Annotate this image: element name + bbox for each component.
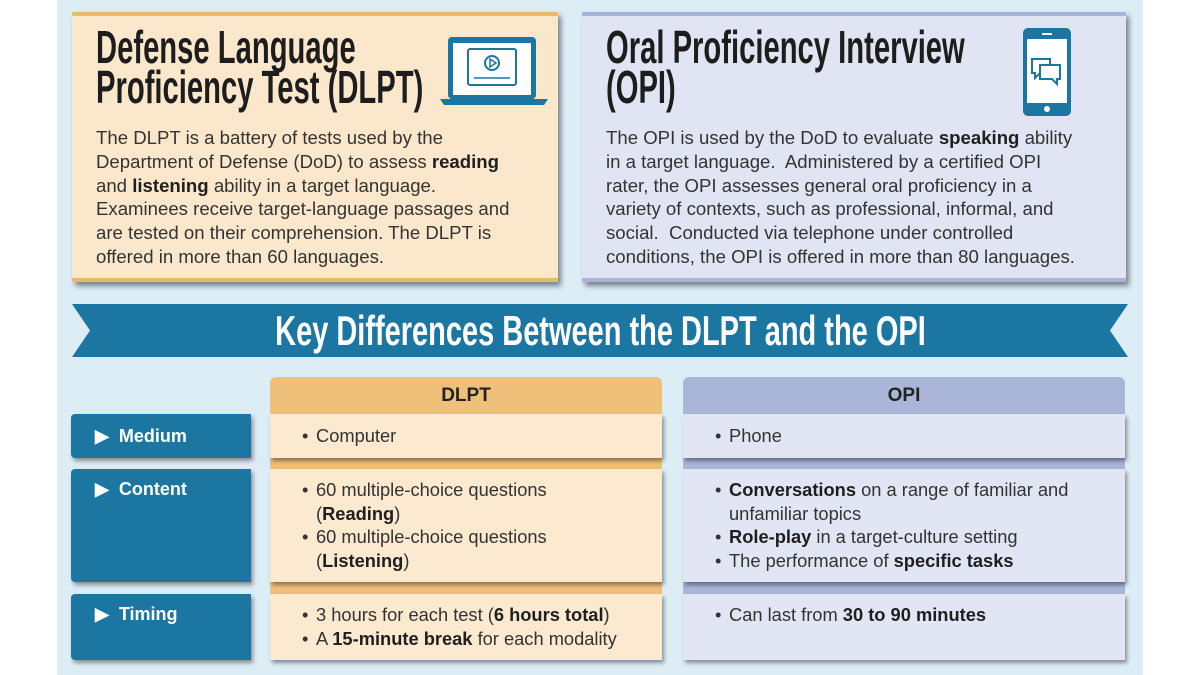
cell: DLPT content: (Reading) — [316, 502, 400, 524]
cell: DLPT medium: Computer — [316, 425, 396, 446]
banner: Key Differences: Key Differences Between the DLPT and the OPI — [275, 307, 925, 354]
cell: OPI content: Role-play in a target-culture setting — [729, 526, 1018, 547]
cell: OPI content: Conversations on a range of familiar and — [729, 479, 1068, 500]
text: DLPT description: and listening ability in a target language. — [96, 175, 436, 196]
cell: OPI timing — [683, 594, 1125, 660]
heading: DLPT: Defense Language — [96, 21, 356, 73]
header: DLPT: DLPT — [441, 385, 491, 406]
cell: DLPT medium — [270, 414, 662, 458]
header: OPI: OPI — [888, 385, 920, 406]
text: DLPT description: offered in more than 60 languages. — [96, 246, 384, 267]
cell: DLPT content: 60 multiple-choice questions — [316, 479, 547, 500]
heading: OPI: Oral Proficiency Interview — [606, 21, 965, 73]
cell: OPI content: The performance of specific tasks — [729, 550, 1014, 570]
panel: OPI description — [582, 12, 1126, 282]
cell: OPI content — [683, 469, 1125, 582]
cell: OPI content: unfamiliar topics — [729, 502, 861, 524]
text: OPI description: The OPI is used by the DoD to evaluate speaking ability — [606, 127, 1072, 148]
text: DLPT description — [96, 127, 509, 267]
text: DLPT description: are tested on their comprehension. The DLPT is — [96, 222, 491, 243]
text: DLPT description: The DLPT is a battery of tests used by the — [96, 127, 443, 148]
row label: Medium: ▶ Medium — [95, 426, 187, 446]
heading: DLPT — [96, 21, 423, 113]
cell: DLPT timing: A 15-minute break for each modality — [316, 628, 617, 648]
row label: Medium — [71, 414, 251, 458]
column background: DLPT — [270, 377, 662, 660]
heading: OPI: (OPI) — [606, 61, 676, 113]
cell: OPI medium: Phone — [729, 425, 782, 446]
text: DLPT description: Department of Defense (DoD) to assess reading — [96, 151, 499, 172]
icon: laptop — [440, 37, 548, 105]
cell: DLPT content: 60 multiple-choice questions — [316, 526, 547, 547]
text: OPI description: conditions, the OPI is offered in more than 80 languages. — [606, 246, 1075, 267]
text: OPI description — [606, 127, 1075, 267]
cell: DLPT content — [270, 469, 662, 582]
column background: OPI — [683, 377, 1125, 660]
text: OPI description: rater, the OPI assesses general oral proficiency in a — [606, 175, 1032, 196]
heading: OPI — [606, 21, 965, 113]
row label: Content — [71, 469, 251, 582]
panel: DLPT description — [72, 12, 558, 282]
banner: Key Differences — [72, 304, 1128, 357]
cell: DLPT timing — [270, 594, 662, 660]
text: DLPT description: Examinees receive target-language passages and — [96, 198, 509, 219]
cell: DLPT timing: 3 hours for each test (6 hours total) — [316, 604, 610, 625]
text: OPI description: variety of contexts, such as professional, informal, and — [606, 198, 1054, 219]
heading: DLPT: Proficiency Test (DLPT) — [96, 61, 423, 113]
cell: OPI medium — [683, 414, 1125, 458]
row label: Timing: ▶ Timing — [95, 604, 178, 624]
cell: OPI timing: Can last from 30 to 90 minutes — [729, 604, 986, 625]
text: OPI description: social. Conducted via telephone under controlled — [606, 222, 1013, 243]
text: OPI description: in a target language. Administered by a certified OPI — [606, 151, 1041, 172]
row label: Content: ▶ Content — [95, 479, 187, 499]
icon: phone — [1023, 28, 1071, 116]
cell: DLPT content: (Listening) — [316, 550, 409, 570]
row label: Timing — [71, 594, 251, 660]
